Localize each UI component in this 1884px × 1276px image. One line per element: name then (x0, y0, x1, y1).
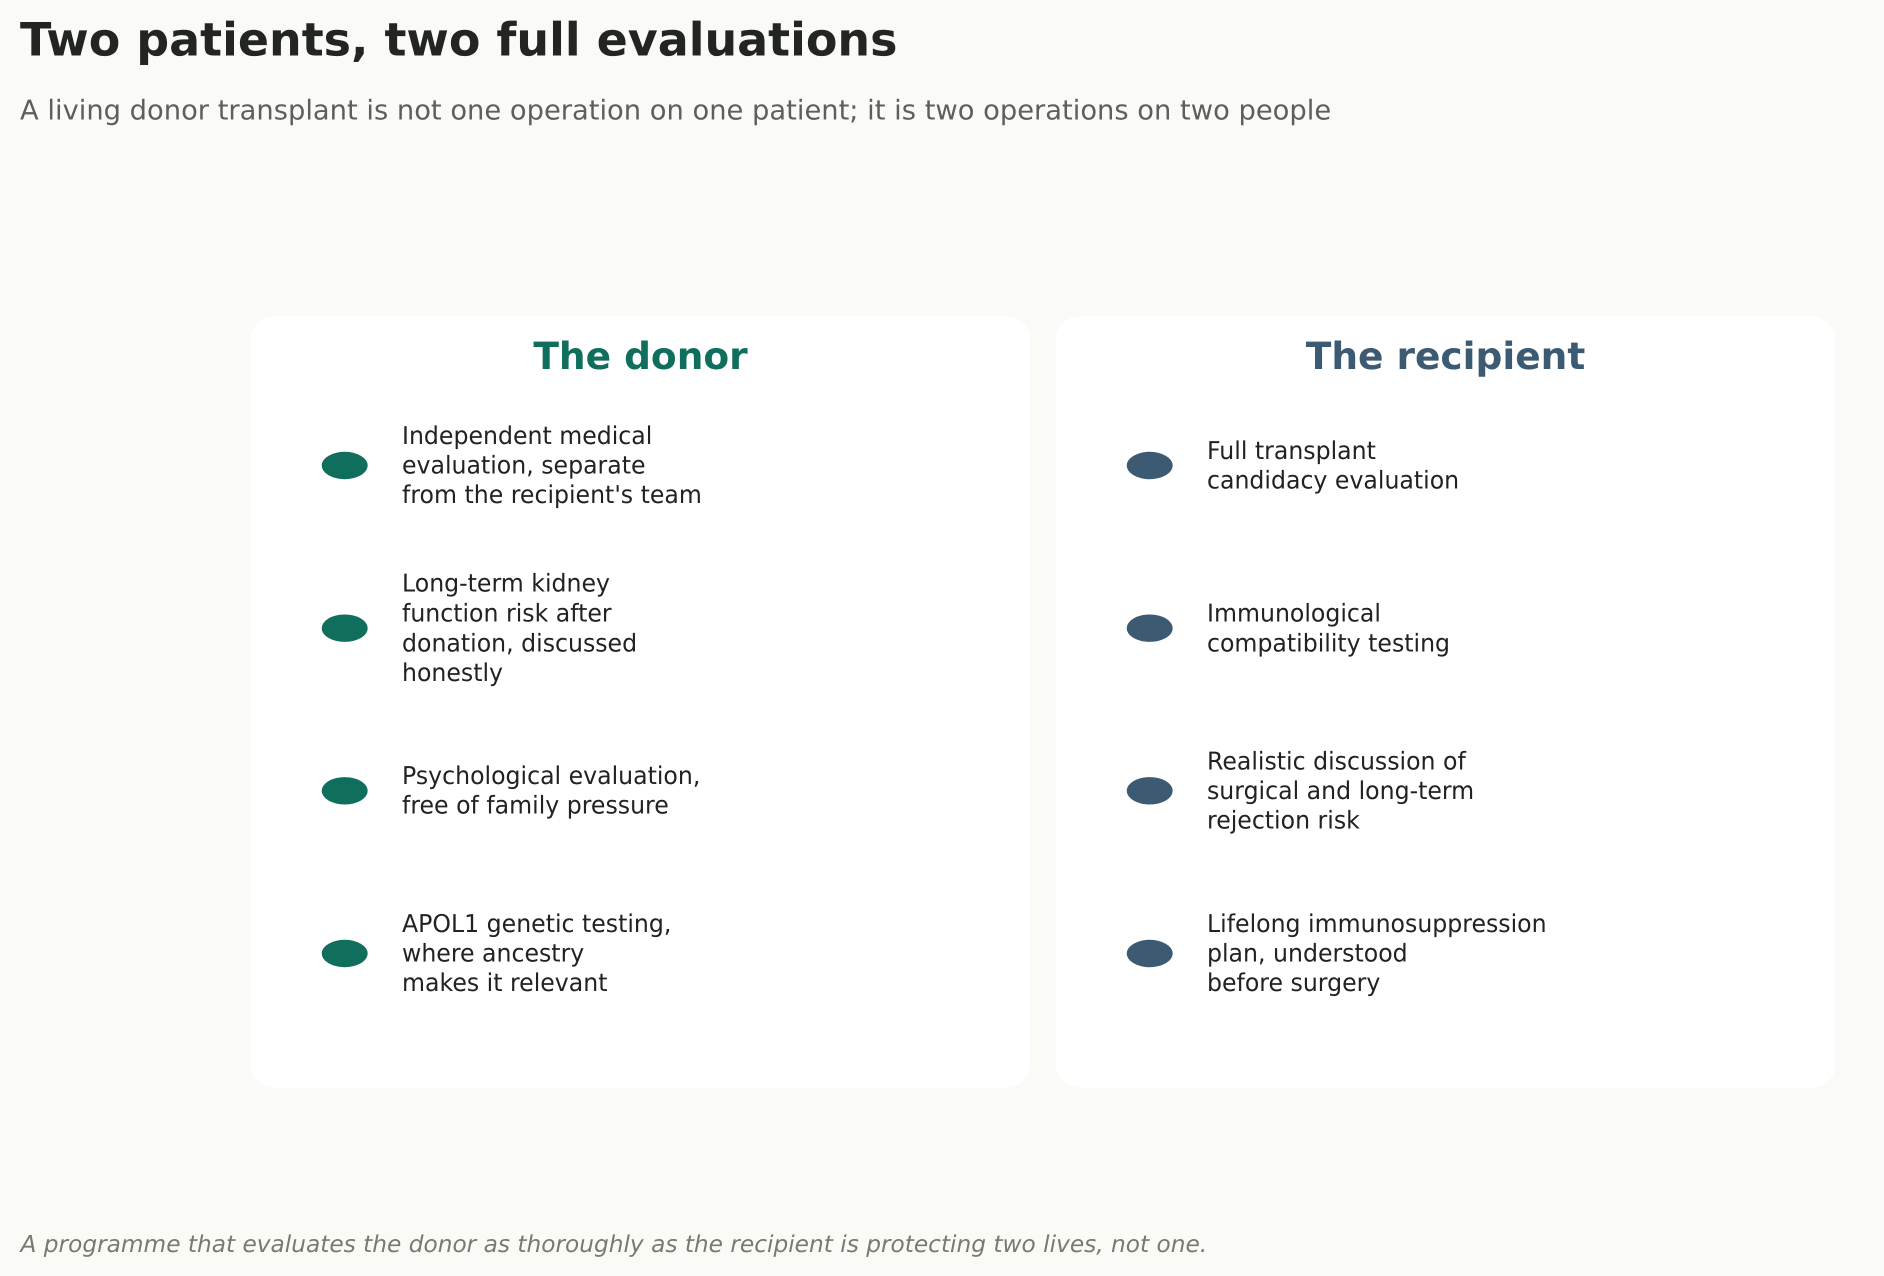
donor item: kidney function risk: function risk after (402, 598, 613, 628)
recipient item: rejection risk: Realistic discussion of (1207, 746, 1467, 776)
donor item: kidney function risk (322, 569, 637, 687)
donor item: APOL1 testing: makes it relevant (402, 968, 608, 997)
donor item: kidney function risk: honestly (402, 658, 503, 687)
donor item: independent evaluation: evaluation, separate (402, 450, 646, 480)
recipient item: immunosuppression plan (1127, 909, 1547, 997)
donor item: kidney function risk: donation, discussed (402, 628, 637, 657)
recipient item: rejection risk: rejection risk (1207, 806, 1361, 834)
donor item: psychological evaluation (322, 761, 700, 820)
recipient item: candidacy evaluation (1127, 436, 1459, 494)
donor item: independent evaluation: from the recipient's team (402, 480, 702, 509)
donor item: APOL1 testing: where ancestry (402, 938, 584, 968)
recipient item: candidacy evaluation: candidacy evaluation (1207, 466, 1459, 494)
recipient item: immunosuppression plan: Lifelong immunosuppression (1207, 909, 1547, 938)
footer note: A programme that evaluates the donor as thoroughly as the recipient is protecting two lives, not one. (18, 1231, 1207, 1258)
heading: the donor: The donor (533, 334, 748, 378)
title: Two patients, two full evaluations (20, 12, 897, 66)
donor item: psychological evaluation: Psychological evaluation, (402, 761, 700, 790)
subtitle: A living donor transplant is not one operation on one patient; it is two operations on two people (20, 96, 1331, 126)
recipient item: immunosuppression plan: before surgery (1207, 968, 1380, 997)
recipient item: immunosuppression plan: plan, understood (1207, 938, 1408, 968)
donor item: APOL1 testing (322, 909, 671, 997)
recipient item: compatibility testing: Immunological (1207, 598, 1381, 628)
donor item: kidney function risk: Long-term kidney (402, 569, 610, 598)
recipient item: rejection risk (1127, 746, 1474, 834)
donor item: APOL1 testing: APOL1 genetic testing, (402, 909, 671, 938)
recipient item: rejection risk: surgical and long-term (1207, 776, 1474, 805)
panel: the donor (251, 316, 1030, 1088)
donor item: independent evaluation: Independent medical (402, 421, 652, 450)
recipient item: compatibility testing (1127, 598, 1450, 657)
panel: the recipient (1056, 316, 1835, 1088)
donor item: psychological evaluation: free of family pressure (402, 790, 669, 820)
recipient item: candidacy evaluation: Full transplant (1207, 436, 1376, 465)
donor item: independent evaluation (322, 421, 702, 509)
recipient item: compatibility testing: compatibility testing (1207, 628, 1450, 657)
heading: the recipient: The recipient (1306, 334, 1585, 378)
